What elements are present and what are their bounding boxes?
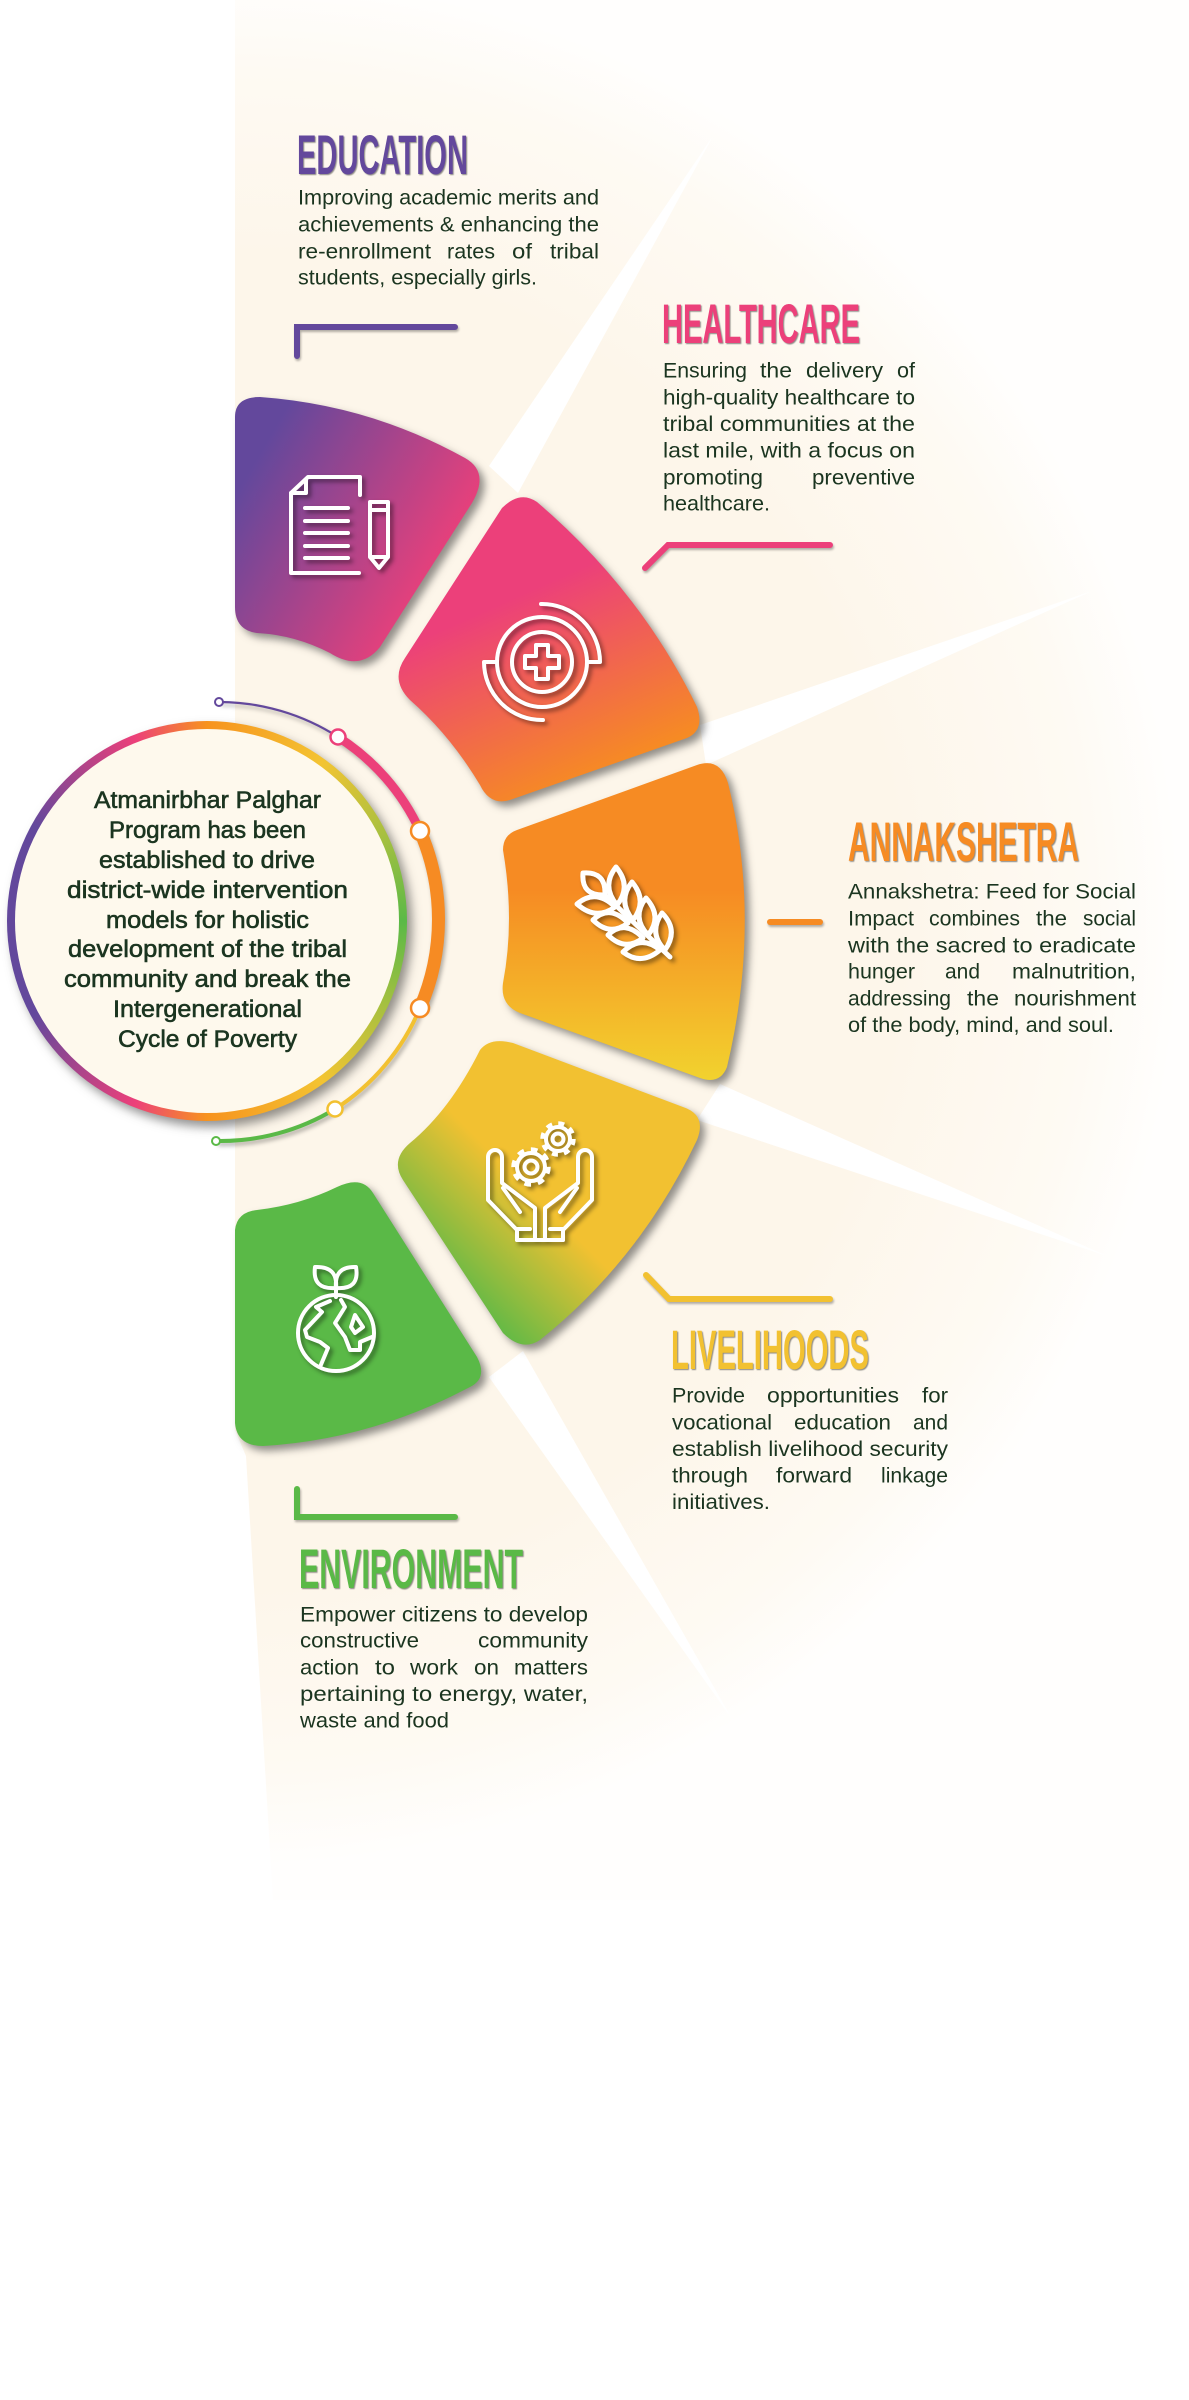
center text: community and break the — [64, 966, 351, 993]
text: annakshetra: the — [1036, 908, 1067, 930]
center text: development of the tribal — [68, 936, 347, 963]
icon: hands with gears — [488, 1124, 592, 1240]
icon: wheat — [577, 867, 671, 959]
text: environment: constructive — [300, 1630, 419, 1652]
text: livelihoods: forward — [776, 1464, 852, 1488]
center text: Atmanirbhar Palghar — [94, 787, 321, 814]
text: environment: pertaining to energy, water, — [300, 1683, 588, 1706]
text: environment: waste and food — [299, 1710, 449, 1732]
dash: annakshetra — [770, 919, 820, 925]
tile: healthcare — [399, 497, 699, 801]
text: education: students, especially girls. — [298, 266, 537, 290]
text: livelihoods: linkage — [881, 1464, 948, 1488]
text: environment: matters — [514, 1656, 588, 1680]
text: annakshetra — [847, 880, 1136, 1037]
tile: education — [235, 397, 480, 661]
center text — [64, 787, 351, 1053]
text: livelihoods: vocational — [672, 1412, 772, 1434]
text: healthcare: of — [897, 360, 915, 382]
text: education: re-enrollment — [298, 240, 431, 264]
text: annakshetra: combines — [929, 908, 1020, 930]
text: annakshetra: malnutrition, — [1012, 960, 1136, 984]
text: education — [298, 186, 599, 290]
text: healthcare — [663, 360, 915, 516]
text: annakshetra: nourishment — [1014, 988, 1136, 1010]
text: environment — [299, 1604, 589, 1732]
text: livelihoods: for — [922, 1384, 948, 1408]
center text: Cycle of Poverty — [118, 1026, 297, 1053]
text: livelihoods: and — [913, 1412, 948, 1434]
text: annakshetra: Impact — [848, 908, 914, 930]
center text: district-wide intervention — [67, 877, 348, 904]
text: livelihoods: Provide — [672, 1384, 745, 1408]
bracket: environment — [297, 1489, 455, 1517]
text: annakshetra: hunger — [848, 960, 915, 984]
tile: annakshetra — [503, 763, 745, 1080]
text: education: tribal — [550, 240, 599, 264]
text: healthcare: tribal communities at the — [663, 413, 915, 436]
center text: Intergenerational — [113, 996, 302, 1023]
text: livelihoods: education — [794, 1412, 891, 1434]
icon: earth with sprout — [298, 1267, 374, 1371]
text: livelihoods: opportunities — [767, 1384, 899, 1408]
bracket: education — [297, 327, 455, 356]
text: environment: action — [300, 1656, 359, 1680]
center text: models for holistic — [106, 907, 309, 934]
tile: livelihoods — [398, 1041, 700, 1345]
central circle — [7, 721, 407, 1121]
text: annakshetra: Annakshetra: Feed for Social — [848, 880, 1136, 904]
heading: healthcare: HEALTHCARE — [662, 292, 860, 355]
text: healthcare: high-quality healthcare to — [663, 386, 915, 410]
text: livelihoods: initiatives. — [672, 1491, 770, 1514]
icon: document and pencil — [291, 477, 388, 573]
icon: medical cross target — [484, 604, 600, 720]
text: livelihoods: through — [672, 1464, 748, 1488]
text: healthcare: delivery — [806, 360, 884, 382]
text: annakshetra: of the body, mind, and soul. — [848, 1014, 1114, 1037]
text: environment: community — [478, 1630, 589, 1652]
text: livelihoods — [672, 1384, 949, 1514]
text: healthcare: last mile, with a focus on — [663, 440, 915, 462]
text: education: of — [512, 240, 532, 264]
text: education: rates — [447, 240, 495, 264]
text: livelihoods: establish livelihood security — [672, 1438, 949, 1461]
text: environment: Empower citizens to develop — [300, 1604, 588, 1626]
text: environment: on — [474, 1656, 499, 1680]
bracket: livelihoods — [646, 1275, 830, 1299]
text: annakshetra: the — [967, 988, 999, 1010]
heading: education: EDUCATION — [297, 123, 468, 186]
text: healthcare: promoting — [663, 466, 763, 490]
text: healthcare: healthcare. — [663, 492, 770, 516]
text: annakshetra: with the sacred to eradicate — [847, 934, 1136, 958]
center text: Program has been — [109, 817, 306, 844]
heading: environment: ENVIRONMENT — [299, 1537, 523, 1600]
text: education: achievements & enhancing the — [298, 214, 599, 236]
text: environment: to — [375, 1656, 395, 1680]
heading: livelihoods: LIVELIHOODS — [671, 1318, 869, 1381]
text: education: Improving academic merits and — [298, 186, 599, 210]
outer arc segments — [212, 698, 438, 1145]
text: healthcare: preventive — [812, 466, 915, 490]
text: healthcare: the — [760, 360, 792, 382]
text: annakshetra: addressing — [848, 988, 951, 1010]
background fan — [235, 34, 1122, 1808]
bracket: healthcare — [645, 545, 830, 568]
tile: environment — [235, 1182, 481, 1446]
text: healthcare: Ensuring — [663, 360, 747, 382]
text: annakshetra: and — [945, 960, 980, 984]
text: environment: work — [409, 1656, 459, 1680]
text: annakshetra: social — [1083, 908, 1136, 930]
center text: established to drive — [99, 847, 315, 874]
